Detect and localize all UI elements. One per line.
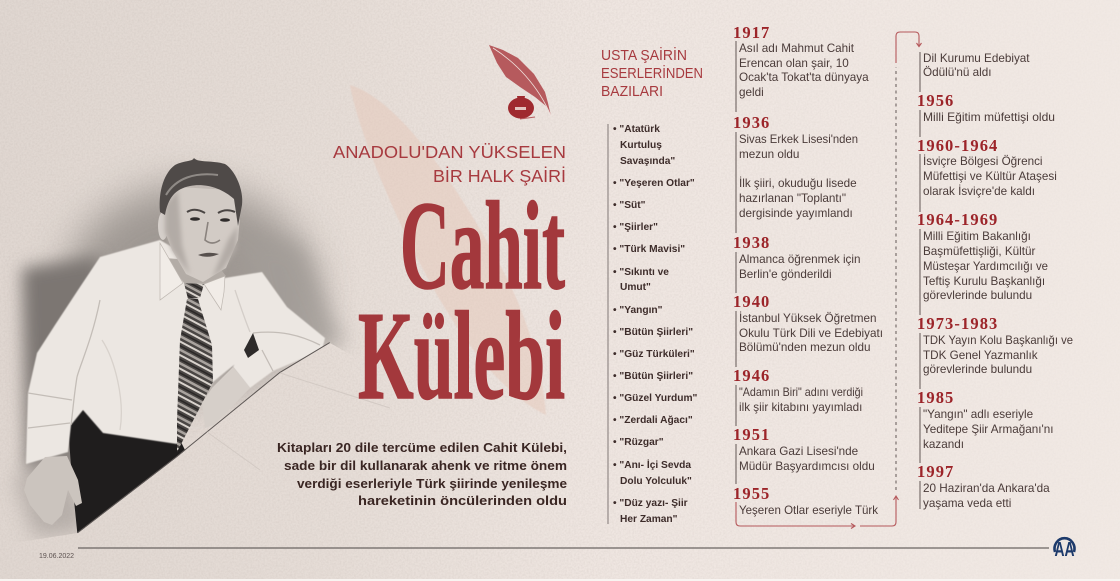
- entry 1960-1964: olarak İsviçre'de kaldı: [923, 185, 1035, 198]
- works list: • "Rüzgar": [613, 437, 664, 448]
- entry 1946: 1946: [733, 366, 770, 385]
- entry 1951: 1951: [733, 425, 770, 444]
- heading: [333, 142, 566, 186]
- works list: [608, 124, 698, 525]
- intro paragraph: [277, 440, 567, 508]
- entry 1955: 1955: [733, 484, 770, 503]
- entry 1936: İlk şiiri, okuduğu lisede: [739, 177, 857, 190]
- title: name: Külebi: [358, 287, 565, 426]
- entry 1960-1964: İsviçre Bölgesi Öğrenci: [923, 155, 1043, 168]
- entry 1938: 1938: [733, 233, 770, 252]
- entry 1973-1983: görevlerinde bulundu: [923, 363, 1032, 376]
- entry 1964-1969: Müsteşar Yardımcılığı ve: [923, 260, 1048, 273]
- shirt: [26, 240, 325, 464]
- works list: • "Güz Türküleri": [613, 349, 695, 360]
- timeline column 2: [917, 52, 1073, 510]
- timeline column 1: [733, 23, 883, 517]
- entry 1917: Ocak'ta Tokat'ta dünyaya: [739, 71, 869, 84]
- entry 1973-1983: [917, 314, 1073, 389]
- watermark feather: [350, 85, 546, 415]
- entry 1956: Milli Eğitim müfettişi oldu: [923, 111, 1055, 124]
- date: 19.06.2022: [39, 553, 74, 560]
- entry 1938: Almanca öğrenmek için: [739, 253, 860, 266]
- arrow: continuation to next column: [736, 32, 922, 528]
- works list: • "Yeşeren Otlar": [613, 178, 695, 189]
- dark gap under arm: [244, 333, 259, 358]
- works list: • "Zerdali Ağacı": [613, 415, 693, 426]
- works list: Her Zaman": [620, 514, 678, 525]
- works list: • "Bütün Şiirleri": [613, 371, 693, 382]
- works list: • "Süt": [613, 200, 646, 211]
- neck: [165, 258, 226, 284]
- entry 1938: Berlin'e gönderildi: [739, 268, 832, 281]
- entry 1951: [733, 425, 875, 484]
- photo: Cahit Külebi at his desk: [15, 158, 345, 540]
- works list: Dolu Yolculuk": [620, 476, 692, 487]
- title: name: [358, 177, 565, 426]
- works list: • "Atatürk: [613, 124, 660, 135]
- mouth: [198, 253, 219, 257]
- entry 1917: [733, 23, 869, 112]
- icon: AA logo: [1054, 538, 1074, 561]
- entry 1964-1969: [917, 210, 1048, 315]
- entry 1940: [733, 292, 883, 367]
- entry 1946: "Adamın Biri" adını verdiği: [739, 386, 863, 399]
- footer rule: [78, 547, 1049, 549]
- entry 1956: [917, 91, 1055, 137]
- entry 1985: kazandı: [923, 438, 964, 451]
- desk edge: [78, 343, 330, 533]
- works list: • "Türk Mavisi": [613, 244, 685, 255]
- works heading: ESERLERİNDEN: [601, 64, 703, 82]
- entry 1938: [733, 233, 860, 293]
- photo backdrop shading: [15, 185, 345, 538]
- works list: • "Sıkıntı ve: [613, 267, 669, 278]
- entry 1973-1983: TDK Genel Yazmanlık: [923, 349, 1038, 362]
- entry 1960-1964: Müfettişi ve Kültür Ataşesi: [923, 170, 1057, 183]
- works list: • "Düz yazı- Şiir: [613, 498, 688, 509]
- collar: [160, 243, 225, 310]
- trousers: [69, 410, 186, 534]
- entry 1940: Bölümü'nden mezun oldu: [739, 341, 871, 354]
- works heading: BAZILARI: [601, 84, 663, 100]
- entry 1946: ilk şiir kitabını yayımladı: [739, 401, 862, 414]
- entry 1955 continued: Dil Kurumu Edebiyat: [923, 52, 1030, 65]
- desk paper crease: [207, 373, 390, 470]
- entry 1964-1969: 1964-1969: [917, 210, 998, 229]
- intro paragraph: Kitapları 20 dile tercüme edilen Cahit Külebi,: [277, 440, 567, 455]
- entry 1936: Sivas Erkek Lisesi'nden: [739, 133, 858, 146]
- intro paragraph: verdiği eserleriyle Türk şiirinde yenileşme: [297, 476, 567, 491]
- entry 1997: [917, 462, 1050, 510]
- head: [158, 158, 242, 282]
- works heading: USTA ŞAİRİN: [601, 46, 687, 64]
- nose: [205, 222, 220, 243]
- entry 1964-1969: görevlerinde bulundu: [923, 289, 1032, 302]
- eyes and brows: [187, 210, 235, 213]
- entry 1997: 20 Haziran'da Ankara'da: [923, 482, 1050, 495]
- entry 1973-1983: TDK Yayın Kolu Başkanlığı ve: [923, 334, 1073, 347]
- works list: Kurtuluş: [620, 140, 662, 151]
- entry 1917: geldi: [739, 86, 764, 99]
- entry 1997: 1997: [917, 462, 954, 481]
- entry 1946: [733, 366, 863, 426]
- entry 1936: [733, 113, 858, 233]
- hair: [160, 158, 242, 226]
- entry 1955 continued: Ödülü'nü aldı: [923, 66, 992, 79]
- entry 1955 continued: [920, 52, 1030, 92]
- entry 1917: Erencan olan şair, 10: [739, 57, 849, 70]
- entry 1985: Yeditepe Şiir Armağanı'nı: [923, 423, 1053, 436]
- icon: feather and inkwell: [489, 45, 551, 119]
- works list: • "Bütün Şiirleri": [613, 327, 693, 338]
- entry 1936: dergisinde yayımlandı: [739, 207, 853, 220]
- entry 1964-1969: Başmüfettişliği, Kültür: [923, 245, 1035, 258]
- entry 1956: 1956: [917, 91, 954, 110]
- intro paragraph: sade bir dil kullanarak ahenk ve ritme önem: [284, 458, 567, 473]
- works list: Savaşında": [620, 156, 675, 167]
- works list: • "Yangın": [613, 305, 663, 316]
- entry 1960-1964: 1960-1964: [917, 136, 998, 155]
- entry 1917: Asıl adı Mahmut Cahit: [739, 42, 855, 55]
- entry 1997: yaşama veda etti: [923, 497, 1011, 510]
- works list: • "Anı- İçi Sevda: [613, 458, 691, 471]
- works heading: [601, 46, 703, 100]
- face: [165, 187, 241, 282]
- entry 1917: 1917: [733, 23, 770, 42]
- heading: ANADOLU'DAN YÜKSELEN: [333, 142, 566, 162]
- entry 1951: Ankara Gazi Lisesi'nde: [739, 445, 858, 458]
- entry 1960-1964: [917, 136, 1057, 212]
- entry 1940: Okulu Türk Dili ve Edebiyatı: [739, 327, 883, 340]
- forearm: [202, 367, 250, 428]
- works list: Umut": [620, 282, 651, 293]
- entry 1985: 1985: [917, 388, 954, 407]
- icon: AA logo: AA: [1054, 539, 1074, 561]
- entry 1964-1969: Milli Eğitim Bakanlığı: [923, 230, 1031, 243]
- intro paragraph: hareketinin öncülerinden oldu: [358, 493, 567, 508]
- entry 1973-1983: 1973-1983: [917, 314, 998, 333]
- entry 1940: 1940: [733, 292, 770, 311]
- left hand: [24, 456, 82, 525]
- works list: • "Şiirler": [613, 222, 658, 233]
- works list: • "Güzel Yurdum": [613, 393, 698, 404]
- entry 1955: Yeşeren Otlar eseriyle Türk: [739, 504, 878, 517]
- ear: [158, 213, 166, 240]
- heading: BİR HALK ŞAİRİ: [433, 166, 566, 186]
- entry 1936: mezun oldu: [739, 148, 799, 161]
- entry 1964-1969: Teftiş Kurulu Başkanlığı: [923, 275, 1045, 288]
- entry 1985: [917, 388, 1053, 463]
- entry 1955: [733, 484, 878, 517]
- entry 1985: "Yangın" adlı eseriyle: [923, 408, 1033, 421]
- entry 1940: İstanbul Yüksek Öğretmen: [739, 312, 877, 325]
- shirt folds: [28, 290, 320, 430]
- title: name: Cahit: [400, 177, 565, 316]
- entry 1951: Müdür Başyardımcısı oldu: [739, 460, 875, 473]
- tie: [177, 283, 213, 452]
- entry 1936: 1936: [733, 113, 770, 132]
- entry 1936: hazırlanan "Toplantı": [739, 192, 846, 205]
